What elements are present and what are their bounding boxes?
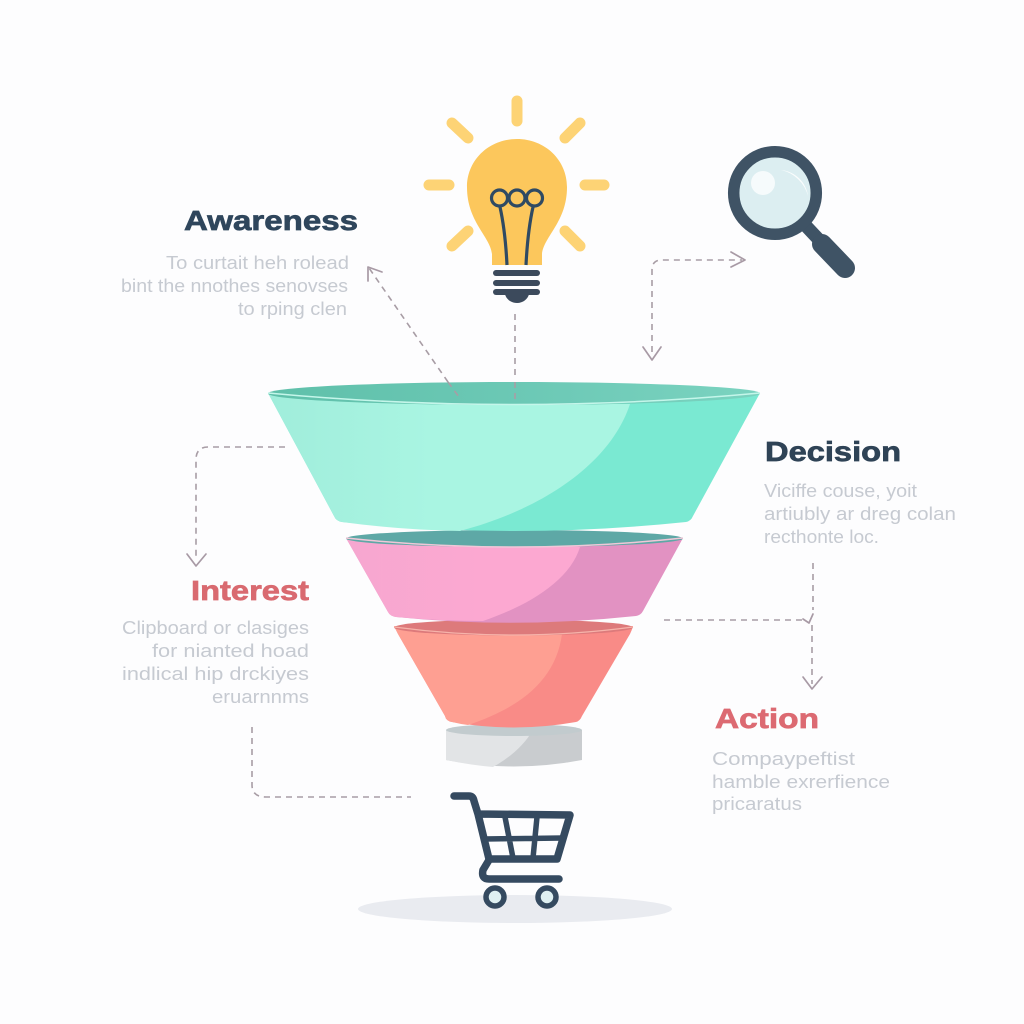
text block: action: pricaratus (712, 794, 802, 814)
text block: awareness: Awareness (184, 205, 358, 236)
icon: shopping cart (454, 796, 570, 906)
text block: awareness: bint the nnothes senovses (121, 276, 348, 296)
text block: decision (764, 436, 956, 547)
funnel tier: action (394, 620, 633, 728)
arrow: funnel to awareness (368, 267, 448, 382)
text block: action (712, 703, 890, 814)
text block: decision: artiubly ar dreg colan (764, 504, 956, 524)
text block: interest: Interest (191, 575, 309, 606)
text block: interest: indlical hip drckiyes (122, 664, 309, 684)
icon: light bulb (429, 101, 604, 303)
text block: action: Compaypeftist (712, 749, 855, 769)
text block: decision: recthonte loc. (764, 527, 879, 547)
arrow: magnifier and funnel connector (643, 252, 745, 360)
text block: action: Action (715, 703, 819, 734)
arrow: bulb to funnel (514, 314, 516, 380)
text block: decision: Decision (765, 436, 901, 467)
text block: interest (122, 575, 309, 707)
text block: awareness: To curtait heh rolead (166, 253, 349, 273)
funnel tier: base (446, 724, 582, 767)
text block: interest: Clipboard or clasiges (122, 618, 309, 638)
funnel tier: interest (346, 530, 683, 623)
text block: awareness: to rping clen (238, 299, 347, 319)
text block: decision: Viciffe couse, yoit (764, 481, 917, 501)
funnel tier: awareness (268, 382, 760, 531)
arrow: funnel to interest (187, 447, 285, 566)
arrow: decision to action (664, 563, 822, 689)
arrow: interest to cart (252, 727, 411, 797)
funnel (268, 382, 760, 767)
ground shadow (358, 895, 672, 923)
text block: interest: for nianted hoad (152, 641, 309, 661)
text block: interest: eruarnnms (212, 687, 309, 707)
text block: awareness (121, 205, 358, 319)
icon: magnifying glass (734, 152, 845, 268)
text block: action: hamble exrerfience (712, 772, 890, 792)
